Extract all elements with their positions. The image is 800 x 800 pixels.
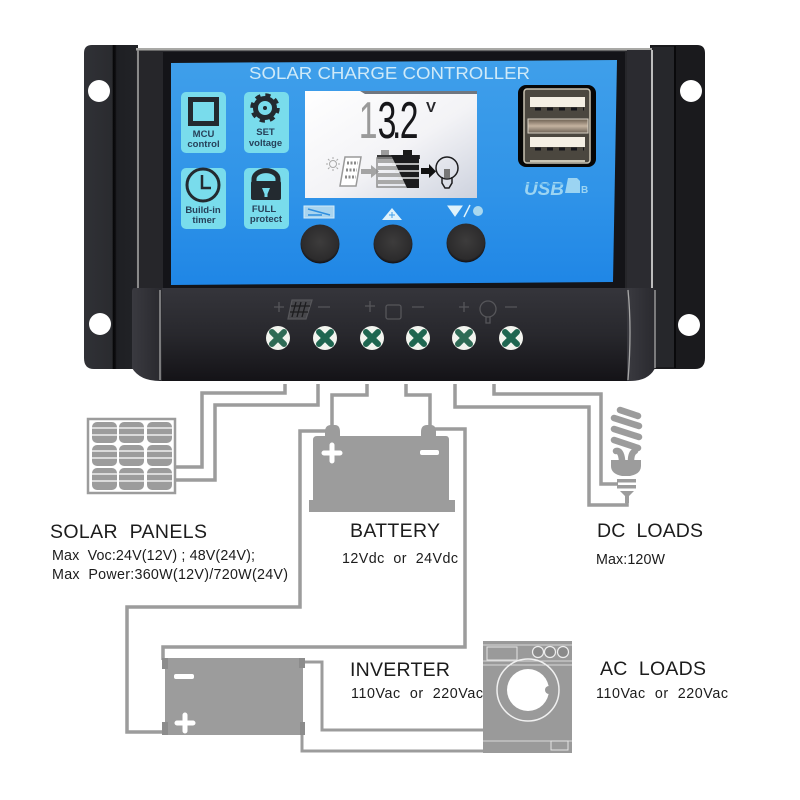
tile: Build-in timer xyxy=(181,168,226,229)
USB label xyxy=(523,178,588,199)
label: AC loads: 110Vac or 220Vac xyxy=(596,686,728,702)
battery wires xyxy=(332,384,367,428)
label: inverter: INVERTER xyxy=(350,659,450,681)
label: solar panels: Max Voc:24V(12V) ; 48V(24V); xyxy=(52,548,255,564)
icon: battery xyxy=(309,425,455,512)
AC wires xyxy=(305,662,484,730)
voltage reading: . xyxy=(392,92,401,150)
LCD display xyxy=(305,91,477,198)
voltage reading: 3 xyxy=(378,92,396,150)
bulb icon xyxy=(436,157,458,188)
mounting holes xyxy=(88,80,702,336)
tile: MCU control: control xyxy=(187,139,220,150)
icon: solar panel xyxy=(88,419,175,493)
label: inverter xyxy=(350,659,483,702)
tile: SET voltage: SET xyxy=(256,127,275,138)
label: solar panels: Max Power:360W(12V)/720W(24V) xyxy=(52,567,288,583)
terminal symbols xyxy=(274,300,517,323)
right mounting flange xyxy=(628,45,705,369)
label: solar panels: SOLAR PANELS xyxy=(50,521,207,543)
terminal bar xyxy=(132,288,656,381)
charge controller device xyxy=(84,45,705,381)
tile: FULL protect: FULL xyxy=(252,204,276,215)
load arrow xyxy=(421,164,436,178)
battery icon xyxy=(377,150,420,188)
sun icon xyxy=(326,157,340,171)
solar panel icon xyxy=(340,157,361,186)
tile: FULL protect: protect xyxy=(250,214,283,225)
tile: FULL protect xyxy=(244,168,289,229)
label: AC loads: AC LOADS xyxy=(600,658,706,680)
icon: inverter xyxy=(162,658,305,735)
wiring diagram lines xyxy=(127,384,627,751)
solar wires xyxy=(176,384,285,467)
load wires xyxy=(455,384,627,505)
inverter wires xyxy=(127,431,330,732)
label: solar panels xyxy=(50,521,288,583)
main housing xyxy=(136,48,652,290)
USB label: USB xyxy=(524,179,564,199)
label: battery xyxy=(342,520,458,567)
left mounting flange xyxy=(84,45,160,369)
arrow xyxy=(361,165,379,178)
label: DC loads: DC LOADS xyxy=(597,520,703,542)
label: DC loads xyxy=(596,520,703,568)
tile: MCU control: MCU xyxy=(193,129,214,140)
voltage reading: 1 xyxy=(359,92,378,150)
tile: SET voltage: voltage xyxy=(249,138,282,149)
push buttons xyxy=(300,224,486,264)
tile: MCU control xyxy=(181,92,226,153)
LCD display: V xyxy=(426,99,436,116)
icon: compact fluorescent bulb xyxy=(611,410,641,503)
label: AC loads xyxy=(596,658,728,702)
label: DC loads: Max:120W xyxy=(596,552,666,568)
icon: washing machine xyxy=(483,641,572,753)
label: inverter: 110Vac or 220Vac xyxy=(351,686,483,702)
blue front panel xyxy=(171,60,617,285)
tile: Build-in timer: timer xyxy=(192,215,216,226)
terminal screws xyxy=(266,326,523,350)
USB label: B xyxy=(581,185,588,196)
tile: SET voltage xyxy=(244,92,289,153)
tile: Build-in timer: Build-in xyxy=(185,205,221,216)
USB charging port xyxy=(518,85,596,167)
label: battery: 12Vdc or 24Vdc xyxy=(342,551,458,567)
panel title: SOLAR CHARGE CONTROLLER xyxy=(249,63,530,83)
voltage reading: 2 xyxy=(400,92,419,150)
label: battery: BATTERY xyxy=(350,520,440,542)
button icons xyxy=(304,205,483,220)
